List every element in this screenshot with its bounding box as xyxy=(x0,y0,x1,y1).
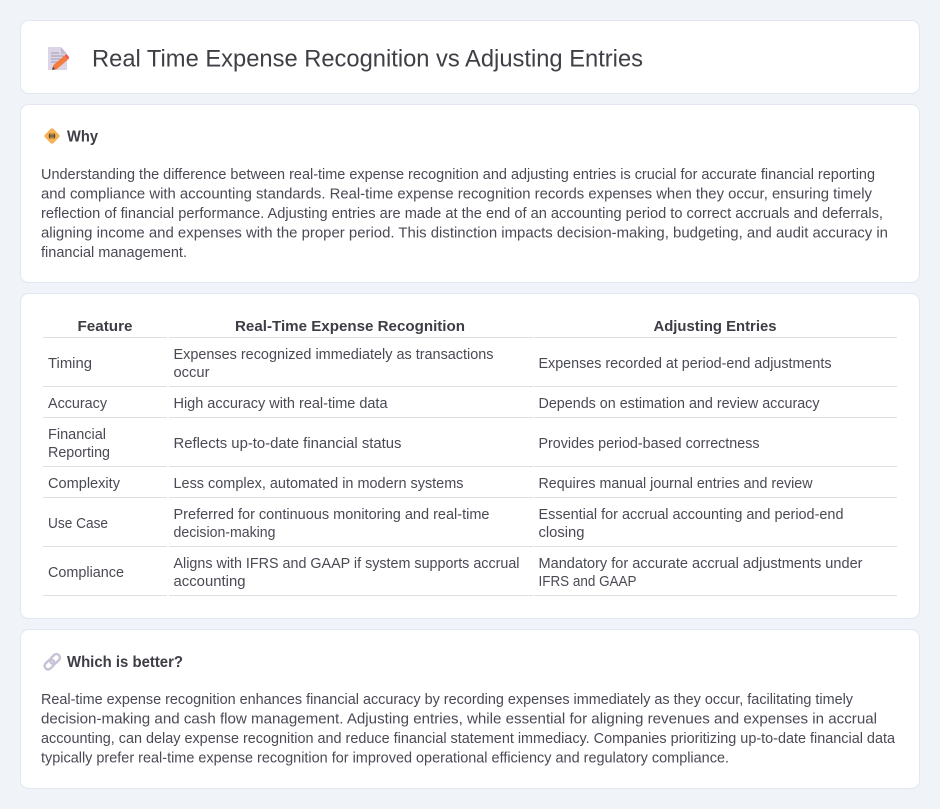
row: compliance: accounting xyxy=(174,574,246,590)
row: compliance xyxy=(48,556,863,590)
row: complexity: Complexity xyxy=(48,476,121,492)
row: accuracy: Depends on estimation and review accuracy xyxy=(538,396,820,412)
panel: title xyxy=(20,20,920,94)
why paragraph: Understanding the difference between real-time expense recognition and adjusting entries is crucial for accurate financial reporting xyxy=(41,167,875,183)
table header: Real-Time Expense Recognition xyxy=(235,318,465,335)
row: accuracy: High accuracy with real-time data xyxy=(174,396,388,412)
row: financial reporting: Financial xyxy=(48,427,106,443)
row: complexity: Requires manual journal entries and review xyxy=(538,476,813,492)
row: use case: closing xyxy=(538,525,584,541)
row: financial reporting: Reflects up-to-date financial status xyxy=(174,436,402,452)
table header xyxy=(78,318,776,335)
row: complexity: Less complex, automated in modern systems xyxy=(174,476,464,492)
row: accuracy: Accuracy xyxy=(48,396,108,412)
row: timing: occur xyxy=(174,365,210,381)
panel: why xyxy=(20,104,920,282)
row: compliance: IFRS and GAAP xyxy=(538,574,636,590)
why paragraph xyxy=(41,167,888,261)
which is better paragraph: accounting, can delay expense recognition and reduce financial statement immediacy. Companies prioritizing up-to-date financial data xyxy=(41,731,895,747)
row: use case: Essential for accrual accounting and period-end xyxy=(538,507,844,523)
row: timing xyxy=(48,347,832,381)
heading: which is better: Which is better? xyxy=(67,654,183,671)
row: financial reporting: Reporting xyxy=(48,445,110,461)
row: accuracy xyxy=(48,396,820,412)
row: use case: Use Case xyxy=(48,516,108,532)
row: timing: Expenses recorded at period-end adjustments xyxy=(538,356,832,372)
row: financial reporting xyxy=(48,427,760,461)
which is better paragraph: typically prefer real-time expense recognition for improved operational efficiency and regulatory compliance. xyxy=(41,750,729,766)
why paragraph: financial management. xyxy=(41,245,187,261)
panel: comparison table xyxy=(20,294,920,618)
why paragraph: reflection of financial performance. Adjusting entries are made at the end of an accounting period to correct accruals and deferrals, xyxy=(41,206,883,222)
row: compliance: Compliance xyxy=(48,565,124,581)
row: complexity xyxy=(48,476,813,492)
row: financial reporting: Provides period-based correctness xyxy=(538,436,760,452)
which is better paragraph: Real-time expense recognition enhances financial accuracy by recording expenses immediately as they occur, facilitating timely xyxy=(41,692,854,708)
icon: link xyxy=(43,653,61,671)
panel: which is better xyxy=(20,630,920,788)
table header: Adjusting Entries xyxy=(654,318,776,335)
heading: why: Why xyxy=(67,128,98,146)
row: compliance: Mandatory for accurate accrual adjustments under xyxy=(538,556,863,572)
title text: Real Time Expense Recognition vs Adjusting Entries xyxy=(92,46,643,72)
why paragraph: and compliance with accounting standards. Real-time expense recognition records expenses when they occur, ensuring timely xyxy=(41,186,873,202)
icon: document with pencil xyxy=(48,47,69,70)
table header: Feature xyxy=(78,318,132,335)
row: use case: decision-making xyxy=(174,525,276,541)
row: use case xyxy=(48,507,844,541)
why paragraph: aligning income and expenses with the proper period. This distinction impacts decision-making, budgeting, and audit accuracy in xyxy=(41,226,888,242)
which is better paragraph xyxy=(41,692,895,766)
row: timing: Expenses recognized immediately as transactions xyxy=(174,347,494,363)
which is better paragraph: decision-making and cash flow management. Adjusting entries, while essential for aligning revenues and expenses in accrual xyxy=(41,712,877,728)
icon: warning diamond xyxy=(44,128,60,144)
row: compliance: Aligns with IFRS and GAAP if system supports accrual xyxy=(174,556,520,572)
row: use case: Preferred for continuous monitoring and real-time xyxy=(174,507,489,523)
row: timing: Timing xyxy=(48,356,92,372)
